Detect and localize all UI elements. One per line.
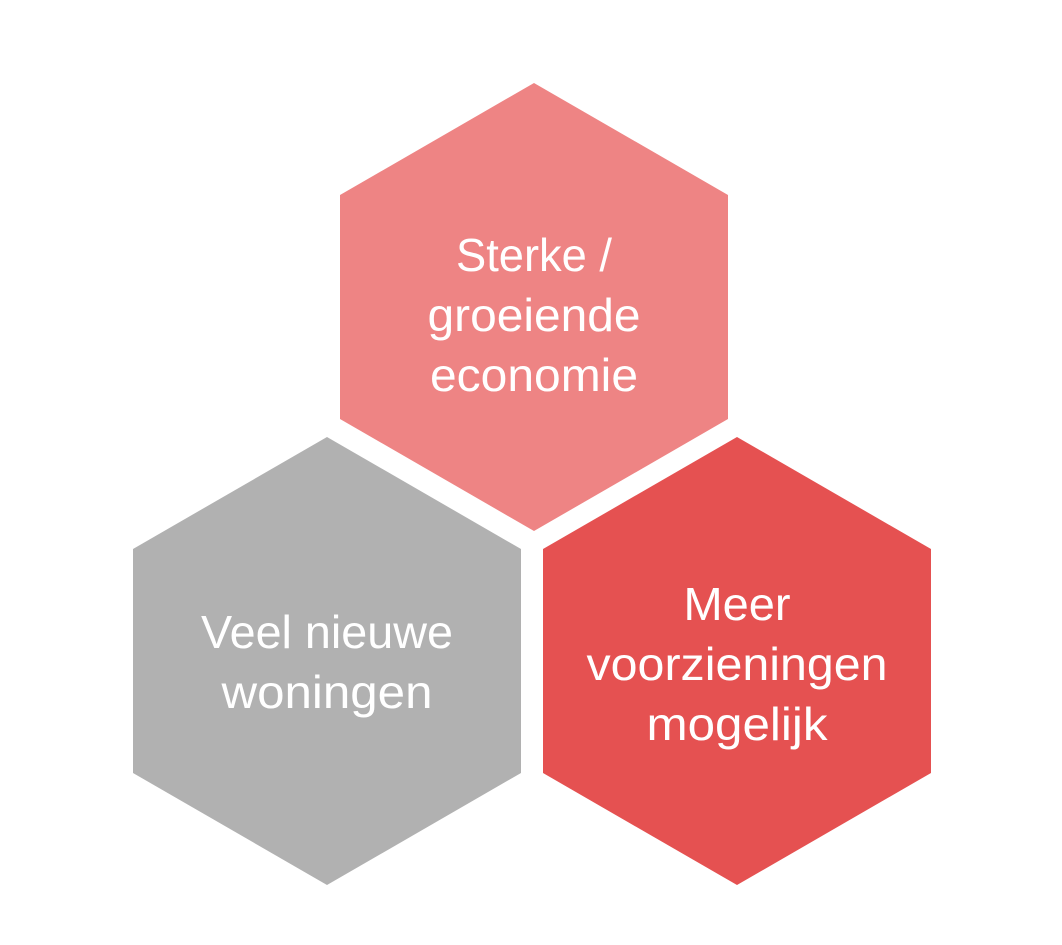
hexagon: Sterke / groeiende economie: groeiende bbox=[428, 289, 640, 341]
hexagon: Sterke / groeiende economie bbox=[340, 83, 728, 531]
hexagon: Veel nieuwe woningen: woningen bbox=[220, 666, 432, 718]
hexagon: Meer voorzieningen mogelijk: Meer bbox=[684, 578, 790, 630]
hexagon: Sterke / groeiende economie: Sterke / bbox=[456, 229, 612, 281]
hexagon: Meer voorzieningen mogelijk bbox=[543, 437, 931, 885]
hexagon: Veel nieuwe woningen: Veel nieuwe bbox=[201, 606, 453, 658]
hexagon: Meer voorzieningen mogelijk: voorzieningen bbox=[586, 638, 888, 690]
hexagon: Veel nieuwe woningen bbox=[133, 437, 521, 885]
hexagon: Sterke / groeiende economie: economie bbox=[430, 349, 638, 401]
hexagon: Meer voorzieningen mogelijk: mogelijk bbox=[646, 698, 829, 750]
